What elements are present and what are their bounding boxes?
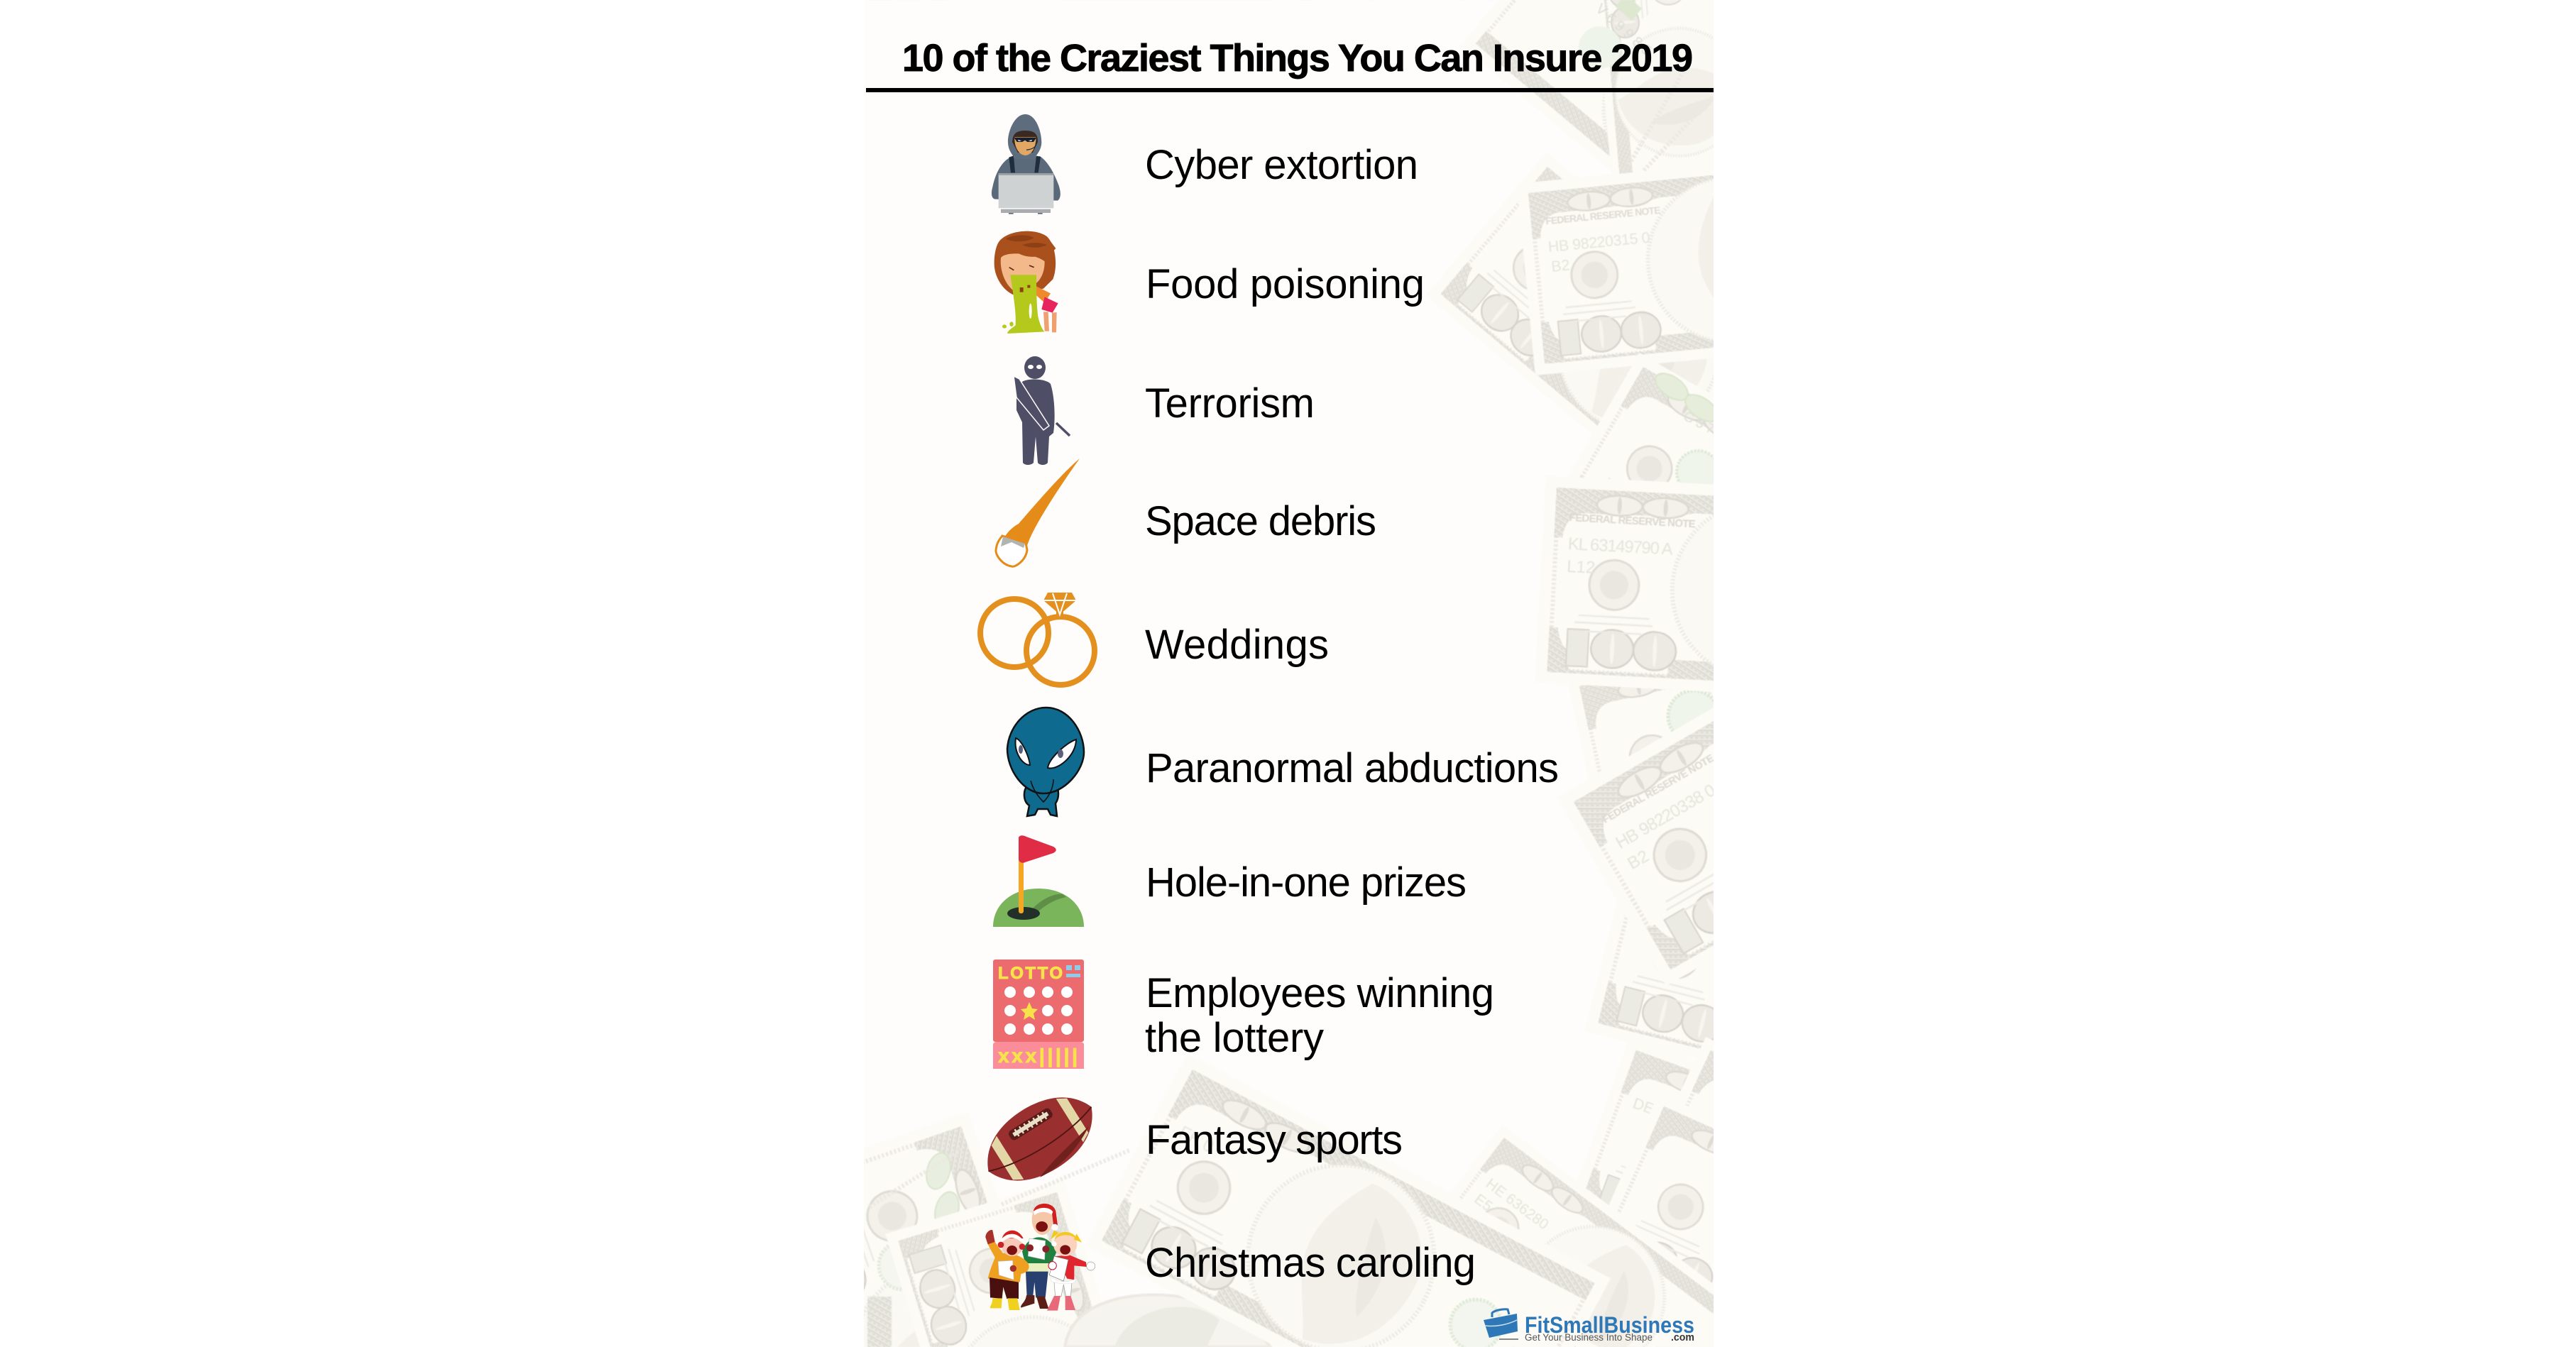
icon: christmas carolers	[985, 1204, 1095, 1311]
icon: lottery ticket	[993, 960, 1084, 1069]
icon: lottery ticket: LOTTO	[998, 964, 1063, 983]
icon: lottery ticket: xxx|||||	[998, 1045, 1078, 1067]
logo icon: briefcase	[1484, 1309, 1518, 1339]
label: space debris: Space debris	[1145, 498, 1376, 544]
label: employees winning the lottery	[1145, 970, 1494, 1061]
label: food poisoning: Food poisoning	[1146, 261, 1425, 307]
icon: armed terrorist silhouette	[1014, 356, 1070, 465]
logo: Fit Small Business	[1484, 1309, 1694, 1343]
icon: hacker at laptop	[992, 114, 1060, 214]
label: paranormal abductions: Paranormal abductions	[1146, 745, 1559, 791]
label: hole-in-one prizes: Hole-in-one prizes	[1146, 859, 1467, 906]
icon: american football	[970, 1078, 1109, 1200]
icon: sick woman vomiting	[994, 231, 1058, 334]
label: employees winning the lottery: Employees winning	[1146, 970, 1494, 1016]
label: cyber extortion: Cyber extortion	[1145, 142, 1418, 188]
logo tagline: Get Your Business Into Shape	[1525, 1332, 1653, 1343]
label: fantasy sports: Fantasy sports	[1146, 1117, 1403, 1163]
label: employees winning the lottery: the lottery	[1145, 1015, 1324, 1061]
label: christmas caroling: Christmas caroling	[1145, 1240, 1476, 1286]
title: 10 of the Craziest Things You Can Insure 2019	[902, 37, 1693, 79]
icon: space debris comet	[996, 458, 1080, 566]
icon: golf flag on green	[993, 835, 1084, 927]
icon: wedding rings	[980, 593, 1095, 685]
icon: alien	[1007, 708, 1084, 816]
logo wordmark: FitSmallBusiness	[1525, 1312, 1694, 1338]
logo suffix: .com	[1671, 1331, 1694, 1343]
title rule	[866, 88, 1714, 92]
panel background: scattered hundred-dollar bills	[864, 0, 1714, 1347]
label: terrorism: Terrorism	[1145, 380, 1315, 427]
label: weddings: Weddings	[1145, 622, 1329, 668]
